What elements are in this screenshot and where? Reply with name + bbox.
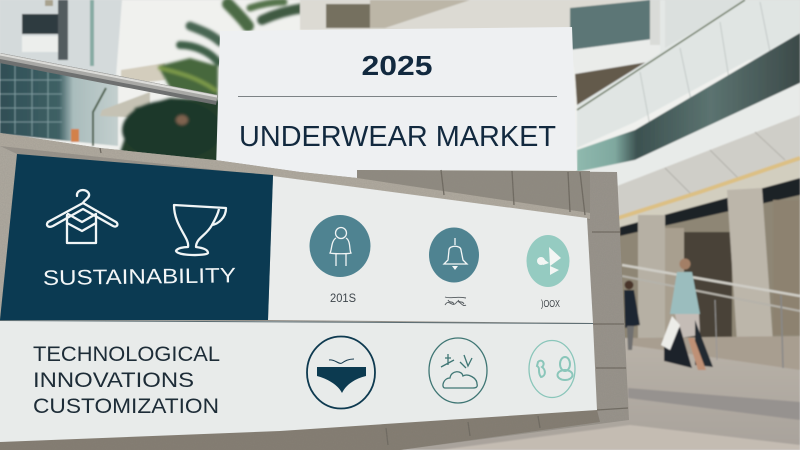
icon: cloud and branches circle bbox=[429, 338, 487, 403]
person: distant walker bbox=[624, 280, 640, 350]
right curved building bbox=[577, 0, 800, 217]
granite wall bbox=[0, 130, 630, 450]
interior and columns bbox=[618, 157, 800, 450]
icon: trophy cup bbox=[174, 205, 226, 255]
palm trees bbox=[120, 2, 304, 170]
year heading: 2025 bbox=[362, 50, 432, 81]
icon: bell circle bbox=[429, 228, 479, 282]
handrail bbox=[0, 54, 217, 100]
label: 201S: 201S bbox=[330, 293, 356, 305]
label: sustainability: SUSTAINABILITY bbox=[43, 264, 236, 290]
building above main sign bbox=[300, 0, 660, 105]
text: technological innovations customization: CUSTOMIZATION bbox=[33, 394, 219, 418]
pavement bbox=[400, 336, 800, 450]
icon: person circle bbox=[310, 215, 370, 277]
person: woman with bags bbox=[661, 258, 713, 370]
upper white panel bbox=[268, 176, 593, 323]
lower white panel bbox=[0, 320, 597, 442]
market title: UNDERWEAR MARKET bbox=[239, 121, 556, 153]
left tower bbox=[0, 0, 122, 76]
top sign panel bbox=[216, 27, 577, 182]
icon: briefs circle bbox=[307, 336, 375, 408]
icon: teal swirls circle bbox=[529, 340, 575, 398]
railings bbox=[622, 265, 800, 368]
text: technological innovations customization: INNOVATIONS bbox=[33, 368, 194, 392]
icon: teal pinwheel circle bbox=[526, 235, 570, 287]
navy sustainability panel bbox=[0, 154, 273, 320]
text: technological innovations customization bbox=[33, 342, 220, 418]
label: )OOX: )OOX bbox=[541, 298, 560, 310]
text: technological innovations customization: TECHNOLOGICAL bbox=[33, 342, 220, 366]
label: squiggle glyph bbox=[445, 297, 466, 306]
distant building bbox=[100, 63, 165, 118]
icon: hanger with shirt bbox=[47, 190, 117, 243]
left glass facade bbox=[0, 60, 118, 146]
